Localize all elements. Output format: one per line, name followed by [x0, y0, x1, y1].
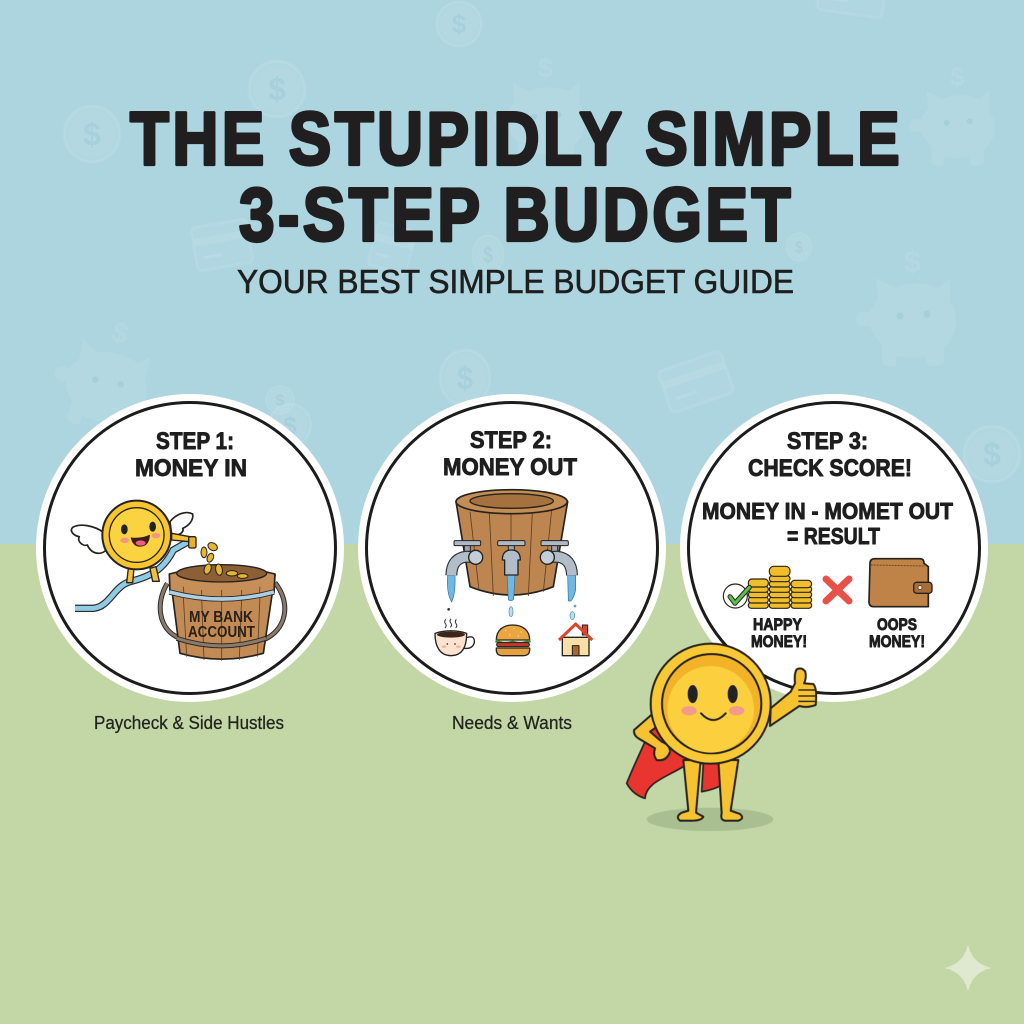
left arm on hip	[634, 712, 670, 760]
label: happy money: HAPPY	[753, 616, 802, 634]
label: oops money: OOPS	[877, 616, 917, 634]
subtitle: YOUR BEST SIMPLE BUDGET GUIDE	[237, 263, 794, 300]
background: grass	[0, 544, 1024, 1024]
icon: falling coins	[201, 541, 223, 576]
panel: step 3 check score	[680, 394, 988, 702]
background pattern: faint money icons	[43, 0, 1020, 482]
panel: step 2 money out	[358, 394, 666, 702]
character: superhero coin with thumbs up	[627, 644, 816, 831]
step 1 heading: STEP 1:	[156, 428, 234, 455]
formula: = RESULT	[787, 523, 881, 549]
red cape	[627, 727, 733, 798]
label: happy money	[751, 616, 807, 651]
step 3 heading: CHECK SCORE!	[748, 455, 912, 482]
step 1 heading: MONEY IN	[135, 455, 247, 482]
step 3 heading: STEP 3:	[787, 428, 868, 455]
bucket label: ACCOUNT	[188, 624, 255, 641]
icon: house	[559, 624, 592, 656]
ground shadow	[647, 808, 773, 831]
icon: burger	[496, 625, 530, 656]
formula: MONEY IN - MOMET OUT	[702, 498, 954, 524]
illustration: barrel	[456, 490, 568, 598]
icon: corner sparkle	[944, 944, 992, 992]
icon: three taps with water	[447, 541, 576, 620]
title	[130, 96, 903, 256]
icon: coin stacks with check mark	[723, 566, 812, 608]
label: happy money: MONEY!	[751, 633, 807, 651]
bucket label	[188, 609, 255, 641]
legs	[678, 760, 703, 821]
right arm and thumb	[770, 668, 816, 726]
step 2 heading: MONEY OUT	[443, 454, 577, 481]
caption: step 2: Needs & Wants	[452, 713, 572, 733]
label: oops money	[869, 616, 925, 651]
step 2 heading: STEP 2:	[470, 427, 552, 454]
label: oops money: MONEY!	[869, 633, 925, 651]
icon: red cross	[826, 579, 849, 601]
step 2 heading	[443, 427, 577, 481]
icon: wallet	[869, 559, 932, 607]
step 3 heading	[748, 428, 912, 482]
illustration: bucket labelled my bank account	[160, 565, 285, 661]
title: 3-STEP BUDGET	[239, 172, 794, 256]
illustration: flying coin with hose	[71, 501, 196, 608]
background: sky	[0, 0, 1024, 544]
face	[688, 685, 698, 703]
caption: step 1: Paycheck & Side Hustles	[94, 713, 284, 733]
formula	[702, 498, 954, 549]
panel: step 1 money in	[36, 394, 344, 702]
title: THE STUPIDLY SIMPLE	[130, 96, 903, 180]
icon: coffee cup	[435, 619, 474, 656]
bucket label: MY BANK	[189, 609, 254, 626]
coin body	[651, 644, 771, 764]
step 1 heading	[135, 428, 247, 482]
